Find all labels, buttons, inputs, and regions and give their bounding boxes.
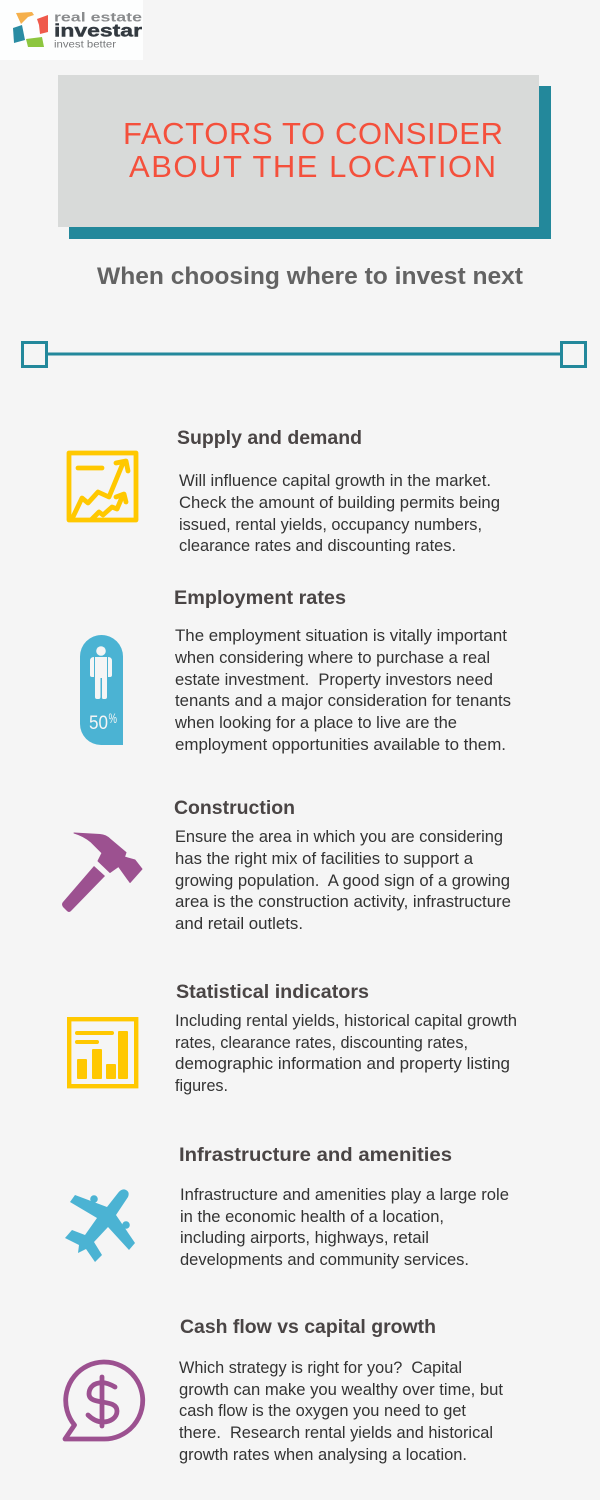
icon: person badge 50% <box>80 635 123 745</box>
body text: when considering where to purchase a real <box>174 649 490 667</box>
body text: employment opportunities available to them. <box>175 736 506 754</box>
body text: issued, rental yields, occupancy numbers, <box>179 516 482 534</box>
body text: tenants and a major consideration for tenants <box>175 692 511 710</box>
percentage: % <box>108 710 117 726</box>
title: FACTORS TO CONSIDER <box>123 116 503 151</box>
section: employment rates <box>174 587 511 754</box>
body text: and retail outlets. <box>175 915 303 933</box>
body text: rates, clearance rates, discounting rates, <box>175 1034 468 1052</box>
percentage: 50 <box>89 712 108 734</box>
body text: there. Research rental yields and historical <box>179 1424 493 1442</box>
body text: developments and community services. <box>180 1251 469 1269</box>
heading: Construction <box>174 797 295 819</box>
body text: demographic information and property listing <box>175 1055 510 1073</box>
body text: including airports, highways, retail <box>180 1229 429 1247</box>
body text: area is the construction activity, infrastructure <box>175 893 511 911</box>
icon: dollar speech bubble <box>65 1362 143 1439</box>
logo <box>0 0 143 60</box>
connector divider <box>22 342 586 366</box>
heading: Statistical indicators <box>176 981 369 1003</box>
body text <box>179 1359 503 1464</box>
body text: Will influence capital growth in the market. <box>179 472 491 490</box>
body text <box>179 472 500 555</box>
body text: growth rates when analysing a location. <box>179 1446 467 1464</box>
body text: Which strategy is right for you? Capital <box>179 1359 462 1377</box>
title: ABOUT THE LOCATION <box>129 149 496 184</box>
body text: The employment situation is vitally important <box>175 627 507 645</box>
icon: airplane <box>65 1189 135 1262</box>
body text <box>180 1186 509 1269</box>
body text <box>174 627 511 754</box>
section: construction <box>174 797 511 933</box>
body text: when looking for a place to live are the <box>174 714 457 732</box>
title panel <box>58 75 551 239</box>
logo wordmark: invest better <box>54 38 117 50</box>
body text: growing population. A good sign of a growing <box>175 872 510 890</box>
icon: rising chart <box>69 453 136 520</box>
section: supply and demand <box>177 427 500 555</box>
subtitle: When choosing where to invest next <box>97 263 523 290</box>
body text: Including rental yields, historical capital growth <box>175 1012 517 1030</box>
logo wordmark: real estate <box>54 10 142 24</box>
section: statistical indicators <box>175 981 517 1095</box>
body text: estate investment. Property investors need <box>175 671 493 689</box>
body text: Ensure the area in which you are considering <box>175 828 503 846</box>
logo wordmark <box>54 10 142 50</box>
heading: Supply and demand <box>177 427 362 449</box>
icon: bar report <box>69 1019 136 1086</box>
body text: Infrastructure and amenities play a large role <box>180 1186 509 1204</box>
body text: in the economic health of a location, <box>180 1208 444 1226</box>
person figure <box>90 646 112 699</box>
body text <box>175 1012 517 1095</box>
icon: logo house <box>13 12 48 47</box>
body text: Check the amount of building permits being <box>179 494 500 512</box>
icon: hammer <box>62 833 142 912</box>
heading: Cash flow vs capital growth <box>180 1316 436 1338</box>
section: infrastructure and amenities <box>179 1144 509 1269</box>
logo wordmark: investar <box>54 21 142 41</box>
body text: cash flow is the oxygen you need to get <box>179 1402 466 1420</box>
body text: clearance rates and discounting rates. <box>179 537 456 555</box>
title <box>123 116 503 184</box>
body text <box>175 828 511 933</box>
body text: has the right mix of facilities to support a <box>175 850 474 868</box>
section: cash flow vs capital growth <box>179 1316 503 1464</box>
heading: Infrastructure and amenities <box>179 1144 452 1166</box>
body text: growth can make you wealthy over time, but <box>179 1381 503 1399</box>
body text: figures. <box>175 1077 228 1095</box>
heading: Employment rates <box>174 587 346 609</box>
